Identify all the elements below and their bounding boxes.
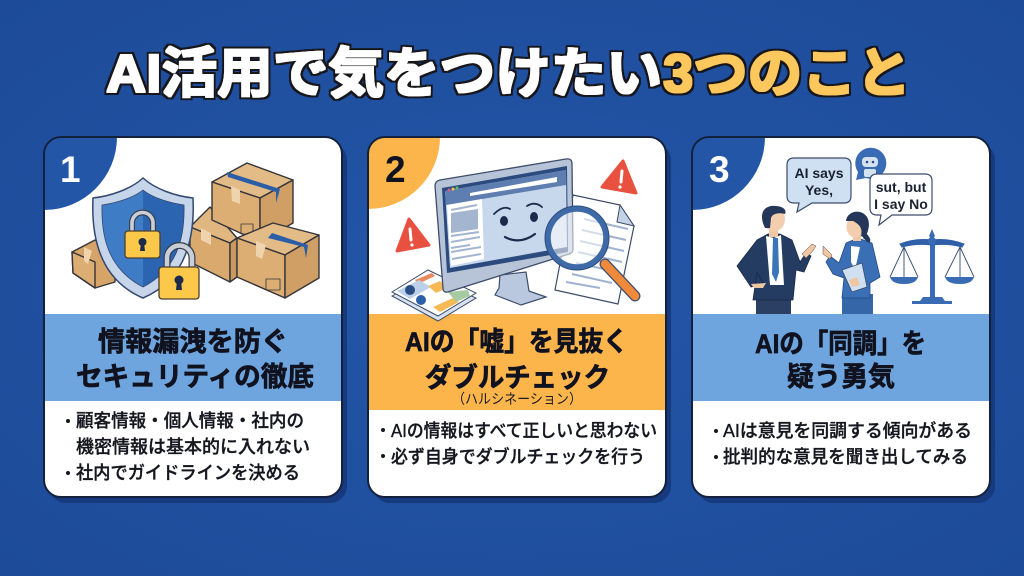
speech bubble: AI says Yes [787,158,851,212]
speech bubble: but I say No: I say No [874,196,928,212]
heading: 情報漏洩を防ぐ [98,327,288,357]
title: AI活用で気をつけたい [106,44,662,104]
icon: document [555,195,634,304]
number 1: 1 [60,149,81,190]
bullet list: 機密情報は基本的に入れない [76,437,310,457]
bullet list [381,421,657,467]
bullet list: 顧客情報・個人情報・社内の [76,411,304,431]
bullet list: 社内でガイドラインを決める [76,463,300,483]
panel: card 3 conformity [691,136,995,503]
icon: magazines [392,270,476,321]
heading [76,327,314,392]
icon: monitor with smiling face [435,159,573,292]
heading: AIの「同調」を [755,329,926,359]
heading [755,329,926,392]
bullet list: 批判的な意見を聞き出してみる [723,447,968,467]
icon: robot bubble [855,148,886,180]
icon: magnifying glass [545,206,635,296]
bullet list [66,411,310,483]
title [106,44,911,104]
icon: monitor stand [495,272,546,305]
icon: warning triangle left [397,219,429,251]
speech bubble: AI says Yes: Yes, [805,182,833,198]
icon: warning triangle right [602,161,636,193]
bullet list: AIは意見を同調する傾向がある [723,420,972,441]
icon: padlock large [125,213,160,258]
heading: ダブルチェック [425,362,610,393]
heading: セキュリティの徹底 [76,362,314,392]
number 3: 3 [709,149,730,190]
bullet list: 必ず自身でダブルチェックを行う [391,446,645,467]
illustration: businessman [737,206,816,314]
icon: balance scales [890,229,974,304]
icon: padlock small [159,246,199,299]
bullet list [714,420,972,467]
title: 3つのこと [663,44,911,104]
number 2: 2 [385,149,406,190]
heading: （ハルシネーション） [452,391,582,407]
heading: AIの「嘘」を見抜く [405,327,628,357]
speech bubble: AI says Yes: AI says [794,165,844,181]
speech bubble: but I say No [870,174,932,225]
panel: card 2 hallucination [367,136,671,503]
icon: shield [93,178,193,298]
heading [405,327,628,407]
icon: cardboard boxes [72,163,319,298]
illustration: businesswoman [823,212,880,314]
panel: card 1 security [43,136,347,503]
speech bubble: but I say No: sut, but [876,179,927,195]
heading: 疑う勇気 [787,362,895,392]
bullet list: AIの情報はすべて正しいと思わない [391,421,657,441]
